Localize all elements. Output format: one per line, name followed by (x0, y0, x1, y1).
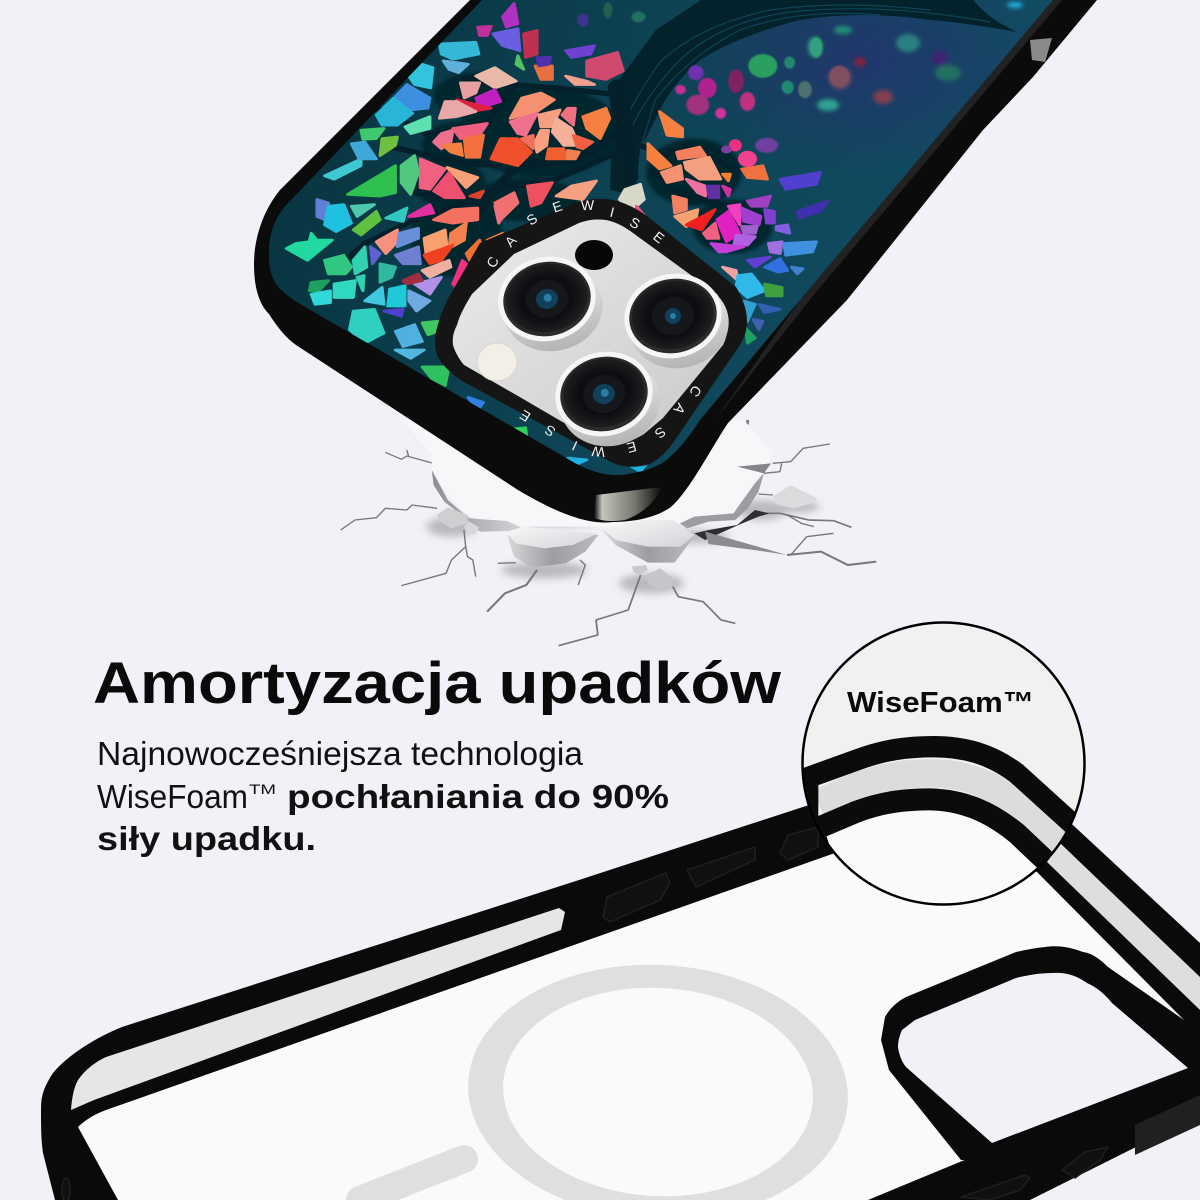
body text: pochłaniania do 90% (287, 778, 669, 815)
dark backing blobs (411, 73, 772, 277)
heading: Amortyzacja upadków (93, 651, 782, 716)
rim sheen (1135, 1095, 1200, 1155)
lens 3 (547, 342, 668, 456)
clear back panel (78, 830, 1184, 1200)
camera island: CASEWISE brand text top: E (550, 197, 564, 216)
body text: WiseFoam (97, 778, 248, 815)
body text: TM (249, 781, 276, 797)
body text (97, 735, 669, 857)
camera island: silver phone back (453, 219, 728, 441)
MagSafe bar (360, 1159, 464, 1200)
camera island: CASEWISE brand text bottom: A (670, 400, 689, 418)
camera island: CASEWISE brand text bottom: C (686, 383, 705, 400)
gray foam strip left (71, 908, 565, 1110)
raised floor plate (401, 420, 773, 527)
orange central cluster (491, 93, 610, 166)
camera window frame (881, 946, 1200, 1160)
rim detail: side buttons (62, 827, 1108, 1200)
plate ridges (432, 470, 521, 532)
gray foam strip right (1047, 843, 1200, 1010)
blurred floating petals (578, 2, 849, 153)
circle label: WiseFoam™ (847, 687, 1034, 719)
case gloss highlight (594, 487, 662, 521)
green and teal left cells (286, 128, 648, 472)
body text: siły upadku. (97, 820, 316, 857)
camera island: CASEWISE brand text bottom: W (590, 443, 606, 460)
rock chunks (437, 485, 817, 591)
black case frame (41, 806, 1200, 1200)
branches (346, 75, 710, 261)
camera island: CASEWISE brand text bottom: S (652, 424, 669, 442)
volume button glint (1030, 38, 1052, 62)
camera island: CASEWISE brand text bottom: E (625, 438, 638, 456)
side rim tone (715, 0, 1062, 420)
case black outer shell (254, 0, 1097, 523)
camera island: CASEWISE brand text top: E (650, 228, 668, 246)
microphone hole (575, 240, 613, 270)
camera island: CASEWISE brand text bottom: E (517, 407, 533, 425)
MagSafe ring (462, 955, 854, 1200)
magnifier circle: WiseFoam detail (801, 621, 1086, 906)
camera island: CASEWISE brand text top: W (581, 197, 595, 213)
camera island: CASEWISE brand text bottom (517, 383, 705, 460)
phone with stained glass case (250, 0, 1097, 523)
camera island: CASEWISE brand text bottom: S (542, 422, 558, 440)
body text: Najnowocześniejsza technologia (97, 735, 584, 772)
right cluster cells (648, 112, 828, 343)
mid cells (371, 181, 648, 291)
blue, cyan and purple cells (376, 3, 623, 134)
camera island: CASEWISE brand text top: S (627, 214, 643, 232)
camera island: CASEWISE brand text bottom: I (569, 438, 580, 454)
camera island: CASEWISE brand text top: A (501, 232, 520, 250)
tree trunk (610, 0, 1017, 195)
lens 1 (490, 247, 611, 361)
magnified case rim (804, 736, 1075, 903)
camera island: black bumper (435, 199, 747, 467)
salmon top cluster (439, 68, 516, 118)
camera island: CASEWISE brand text top: I (608, 204, 616, 220)
far right blurred petals (808, 2, 1023, 111)
camera island: CASEWISE brand text top: C (483, 254, 502, 270)
camera island: CASEWISE brand text top (483, 197, 668, 270)
lens 2 (616, 264, 737, 378)
glass cells (286, 2, 849, 472)
circle outline (802, 622, 1084, 904)
clear case at the bottom (41, 806, 1200, 1200)
crater: cracked floor under the phone (341, 420, 876, 646)
camera island: CASEWISE brand text top: S (523, 210, 540, 228)
left orange cluster (420, 123, 487, 198)
flash (477, 343, 517, 381)
artwork: stained glass tree (250, 0, 1070, 490)
cracks (341, 420, 876, 646)
camera window opening (898, 973, 1188, 1143)
soft crater shadows (426, 500, 819, 593)
